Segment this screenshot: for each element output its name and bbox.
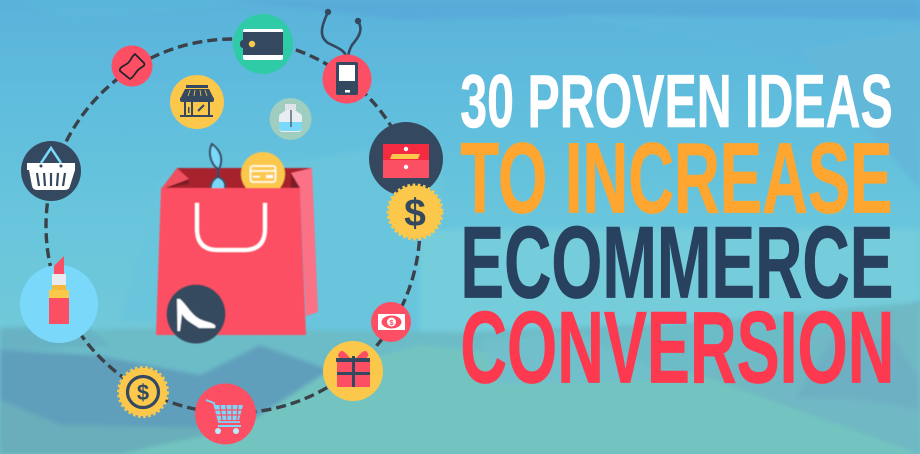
icon: coin badge [119,368,167,416]
icon: banknote [371,302,411,342]
icon: phone with earphones [322,9,372,103]
icon: lipstick [20,256,98,343]
bag back [161,168,312,190]
glasses [210,144,225,190]
icon: gift [323,341,383,401]
card icon [241,152,285,196]
icon: ticket [112,46,152,86]
bag left flap [161,168,189,189]
icon: wallet [233,14,293,74]
bag front [156,188,306,335]
icon: banknote: $ [389,318,394,327]
icon: dollar badge [388,186,442,238]
bag handle [197,203,265,250]
icon: perfume [270,98,312,140]
icon: dollar badge: $ [404,192,426,235]
title [460,59,894,405]
icon: drawer [369,122,443,196]
dashed ring [46,39,420,413]
icon: basket [21,141,81,201]
icon: cart [195,384,256,444]
icon: store [170,75,224,129]
bag right flap [291,168,318,316]
icon: coin badge: $ [137,380,149,405]
shoe icon [166,284,226,344]
shopping bag [156,144,318,344]
